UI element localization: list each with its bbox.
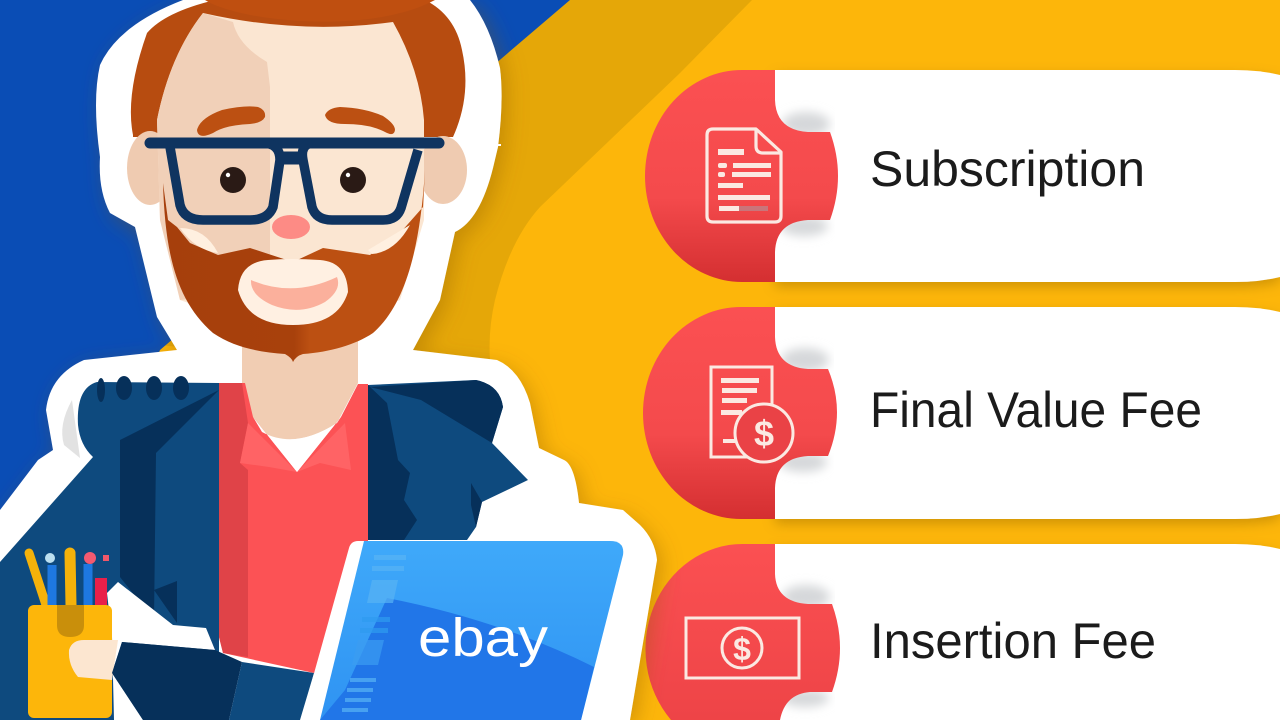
sleeve [112, 642, 314, 720]
character illustration [0, 0, 657, 720]
tick mark [493, 144, 501, 146]
eyes [220, 167, 366, 193]
label: Subscription: Subscription [870, 141, 1145, 197]
icon: document [707, 129, 781, 222]
card background [775, 544, 1280, 720]
notch shadows [781, 585, 830, 707]
jacket right [368, 380, 528, 540]
notch shadows [780, 112, 830, 236]
label: Final Value Fee: Final Value Fee [870, 382, 1202, 438]
pencil cup [28, 552, 112, 718]
card background [775, 70, 1280, 282]
logo: ebay: ebay [418, 608, 548, 668]
face [157, 13, 424, 340]
hat brim [205, 0, 435, 22]
label: Insertion Fee: Insertion Fee [870, 613, 1156, 669]
white paper [107, 582, 215, 720]
icon: banknote: $ [733, 631, 751, 667]
sticker outline [0, 0, 657, 720]
icon: invoice with coin: $ [754, 413, 774, 454]
glasses [150, 143, 439, 220]
ears [127, 131, 467, 205]
laptop [301, 541, 623, 720]
eyebrows [197, 106, 395, 136]
red badge [645, 544, 840, 720]
shirt [219, 383, 368, 700]
red badge [643, 307, 837, 519]
notch shadows [779, 348, 829, 472]
mouth [238, 259, 348, 325]
panel: subscription card [645, 70, 1280, 282]
panel: final value fee card [643, 307, 1280, 519]
panel: insertion fee card [645, 544, 1280, 720]
cheek highlights [180, 225, 410, 254]
hand [69, 640, 118, 680]
beard [163, 170, 425, 362]
left shoulder shading [62, 400, 80, 458]
icon: invoice with coin [711, 367, 793, 462]
icon: banknote [686, 618, 799, 678]
jacket left [0, 376, 219, 720]
red badge [645, 70, 838, 282]
neck [242, 340, 358, 440]
card background [775, 307, 1280, 519]
hair [131, 0, 465, 137]
nose [272, 215, 310, 239]
